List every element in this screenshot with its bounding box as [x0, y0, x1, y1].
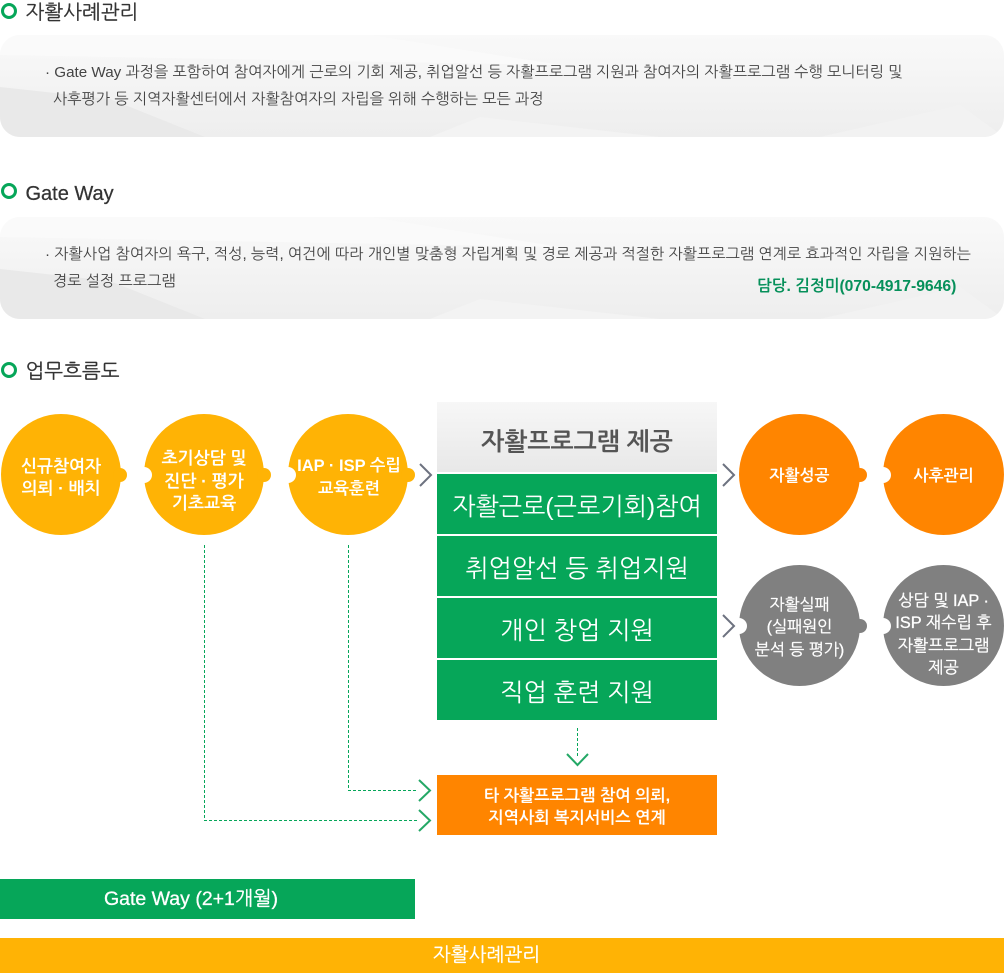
circle: failure: 분석 등 평가) [755, 642, 844, 659]
dashed line: consultation [204, 545, 417, 820]
connector notch [875, 618, 891, 634]
circle: success: 자활성공 [769, 468, 830, 485]
program: job placement [437, 536, 717, 596]
circle: initial consultation [144, 414, 264, 535]
heading: Gate Way: Gate Way [26, 183, 114, 205]
program header: 자활프로그램 제공 [481, 429, 673, 456]
bar fill: gate way [0, 879, 415, 919]
circle: new participants: 의뢰 · 배치 [21, 478, 101, 498]
panel: case management description [0, 35, 1004, 137]
program: startup support [437, 598, 717, 658]
arrow: to linkage 2 [419, 810, 430, 831]
circle: new participants [1, 414, 121, 535]
circle: re-consultation: 상담 및 IAP · [898, 592, 989, 610]
circle: initial consultation: 기초교육 [172, 494, 236, 513]
connector dot [401, 468, 415, 482]
circle: IAP ISP: 교육훈련 [318, 480, 380, 498]
connector notch [731, 618, 747, 634]
description text [45, 64, 903, 108]
circle: aftercare: 사후관리 [913, 468, 974, 485]
description text: · 자활사업 참여자의 욕구, 적성, 능력, 여건에 따라 개인별 맞춤형 자립계획 및 경로 제공과 적절한 자활프로그램 연계로 효과적인 자립을 지원하는 [45, 246, 971, 263]
program header [437, 402, 717, 472]
description text [45, 246, 971, 290]
program: vocational training: 직업 훈련 지원 [500, 680, 654, 707]
linkage box [437, 775, 717, 835]
bar label: gate way duration: Gate Way (2+1개월) [104, 888, 278, 910]
contact: 담당. 김정미(070-4917-9646) [757, 278, 956, 295]
circle: success [739, 414, 860, 535]
circle: aftercare [883, 414, 1004, 535]
bar fill: case management [0, 938, 1004, 973]
description text: 경로 설정 프로그램 [53, 273, 176, 290]
panel: gate way description [0, 217, 1004, 319]
connector dot [257, 468, 271, 482]
program: self-support work [437, 474, 717, 534]
connector dot [853, 619, 867, 633]
dashed line: down [576, 728, 578, 757]
circle: re-consultation [883, 565, 1004, 686]
program: startup support: 개인 창업 지원 [500, 618, 654, 645]
linkage box: 타 자활프로그램 참여 의뢰, [484, 787, 670, 805]
section marker: workflow [1, 362, 17, 378]
panel background facets [0, 269, 125, 288]
section marker: gate way [1, 183, 17, 199]
heading: 자활사례관리: 자활사례관리 [26, 2, 138, 24]
connector dot [853, 468, 867, 482]
circle: failure: (실패원인 [767, 619, 832, 636]
circle: initial consultation: 진단 · 평가 [164, 472, 244, 491]
arrow: to success [723, 464, 734, 486]
panel background facets [0, 87, 125, 106]
arrow: to linkage 1 [419, 780, 430, 801]
circle: IAP ISP: IAP · ISP 수립 [297, 457, 401, 475]
circle: initial consultation: 초기상담 및 [161, 449, 247, 468]
connector notch [875, 467, 891, 483]
arrow: down [567, 754, 588, 765]
linkage box: 지역사회 복지서비스 연계 [488, 809, 666, 827]
program: job placement: 취업알선 등 취업지원 [465, 556, 689, 583]
connector notch [136, 467, 152, 483]
circle: IAP ISP [288, 414, 408, 535]
program: vocational training [437, 660, 717, 720]
circle: re-consultation: 자활프로그램 [898, 636, 989, 654]
dashed line: IAP [348, 545, 417, 790]
description text: · Gate Way 과정을 포함하여 참여자에게 근로의 기회 제공, 취업알선 등 자활프로그램 지원과 참여자의 자활프로그램 수행 모니터링 및 [45, 64, 903, 81]
circle: failure: 자활실패 [769, 597, 830, 614]
circle: new participants: 신규참여자 [21, 456, 101, 476]
section marker: case management [1, 3, 17, 19]
bar label: case management: 자활사례관리 [433, 945, 540, 966]
program: self-support work: 자활근로(근로기회)참여 [452, 494, 702, 521]
heading: 업무흐름도: 업무흐름도 [26, 361, 120, 383]
arrow: to failure [723, 615, 734, 637]
arrow: to programs [420, 464, 431, 486]
circle: failure [739, 565, 860, 686]
circle: re-consultation: ISP 재수립 후 [895, 614, 992, 632]
description text: 사후평가 등 지역자활센터에서 자활참여자의 자립을 위해 수행하는 모든 과정 [53, 91, 544, 108]
connector dot [113, 468, 127, 482]
connector notch [280, 467, 296, 483]
circle: re-consultation: 제공 [928, 659, 959, 677]
